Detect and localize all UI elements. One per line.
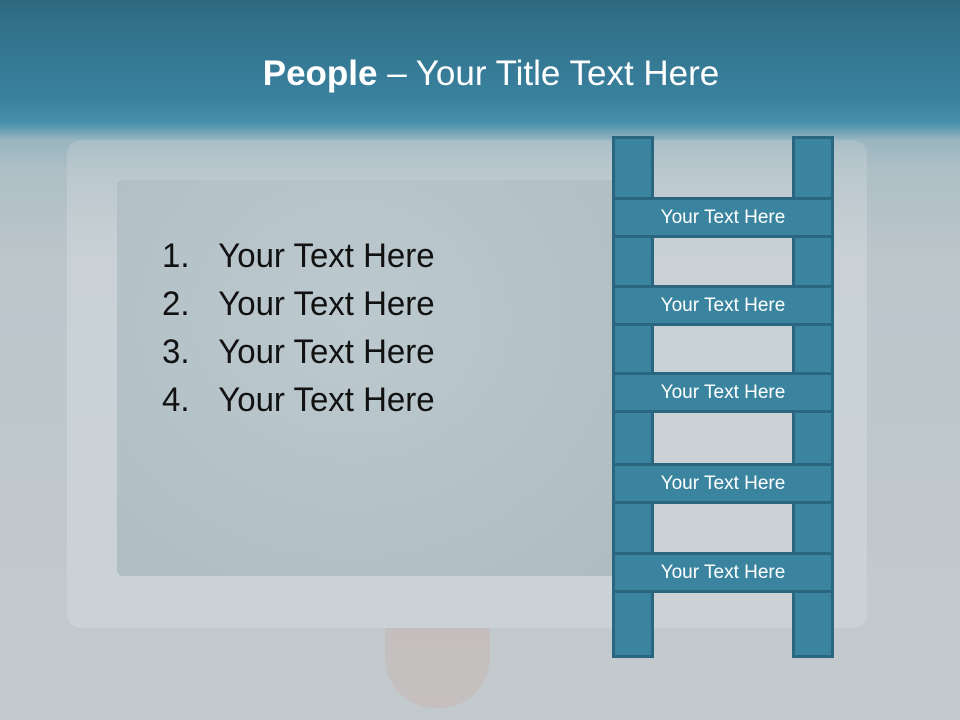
rung 1: Your Text Here bbox=[661, 207, 785, 228]
rung 4 bbox=[612, 463, 834, 504]
rung 2: Your Text Here bbox=[661, 295, 785, 316]
rung 5 bbox=[612, 552, 834, 593]
rung 5: Your Text Here bbox=[661, 562, 785, 583]
rung 4: Your Text Here bbox=[661, 473, 785, 494]
rung 3 bbox=[612, 372, 834, 413]
tablet background bbox=[67, 140, 867, 628]
header band bbox=[0, 0, 960, 140]
rung 1 bbox=[612, 197, 834, 238]
rung 2 bbox=[612, 285, 834, 326]
rung 3: Your Text Here bbox=[661, 382, 785, 403]
numbered list: Your Text Here bbox=[218, 333, 435, 371]
numbered list: Your Text Here bbox=[218, 285, 435, 323]
numbered list: 3. bbox=[162, 333, 190, 371]
left rail bbox=[612, 136, 654, 658]
numbered list: 1. bbox=[162, 237, 190, 275]
title: People – Your Title Text Here bbox=[263, 54, 719, 93]
tablet screen bbox=[117, 180, 637, 576]
numbered list: Your Text Here bbox=[218, 237, 435, 275]
right rail bbox=[792, 136, 834, 658]
numbered list: 4. bbox=[162, 381, 190, 419]
hand bbox=[385, 628, 490, 708]
numbered list: Your Text Here bbox=[218, 381, 435, 419]
numbered list bbox=[162, 237, 435, 419]
numbered list: 2. bbox=[162, 285, 190, 323]
